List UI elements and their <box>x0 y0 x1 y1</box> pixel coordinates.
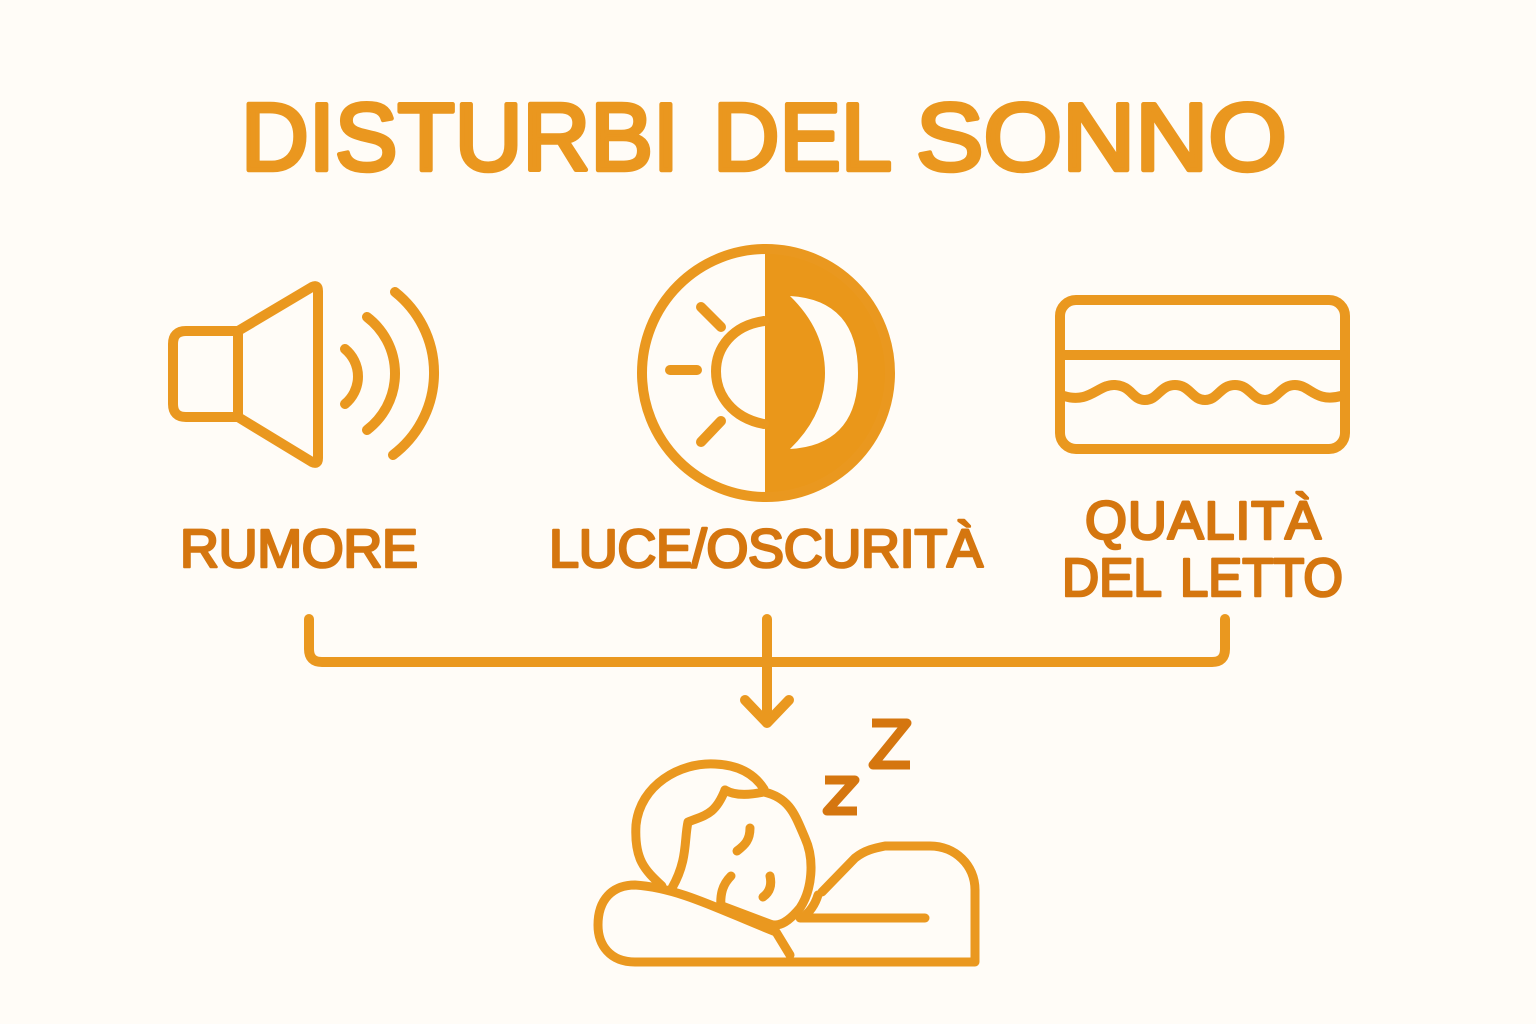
icon: mattress <box>1060 300 1345 449</box>
label: qualità del letto <box>1062 491 1343 608</box>
icon: sleeping person <box>598 764 975 962</box>
label: rumore: RUMORE <box>180 519 418 579</box>
title: DISTURBI <box>241 84 679 191</box>
icon: half sun half moon <box>642 249 890 497</box>
title: SONNO <box>916 84 1287 191</box>
label: qualità del letto: DEL <box>1062 548 1162 608</box>
title: DEL <box>713 84 892 191</box>
label: luce/oscurità: LUCE/OSCURITÀ <box>549 519 983 579</box>
connector arrow into sleeper <box>309 619 1225 723</box>
icon: speaker with sound waves <box>173 286 434 463</box>
title <box>241 84 1287 191</box>
label: qualità del letto: QUALITÀ <box>1085 491 1321 551</box>
icon: sleep letters Z <box>825 723 910 811</box>
label: qualità del letto: LETTO <box>1180 548 1343 608</box>
